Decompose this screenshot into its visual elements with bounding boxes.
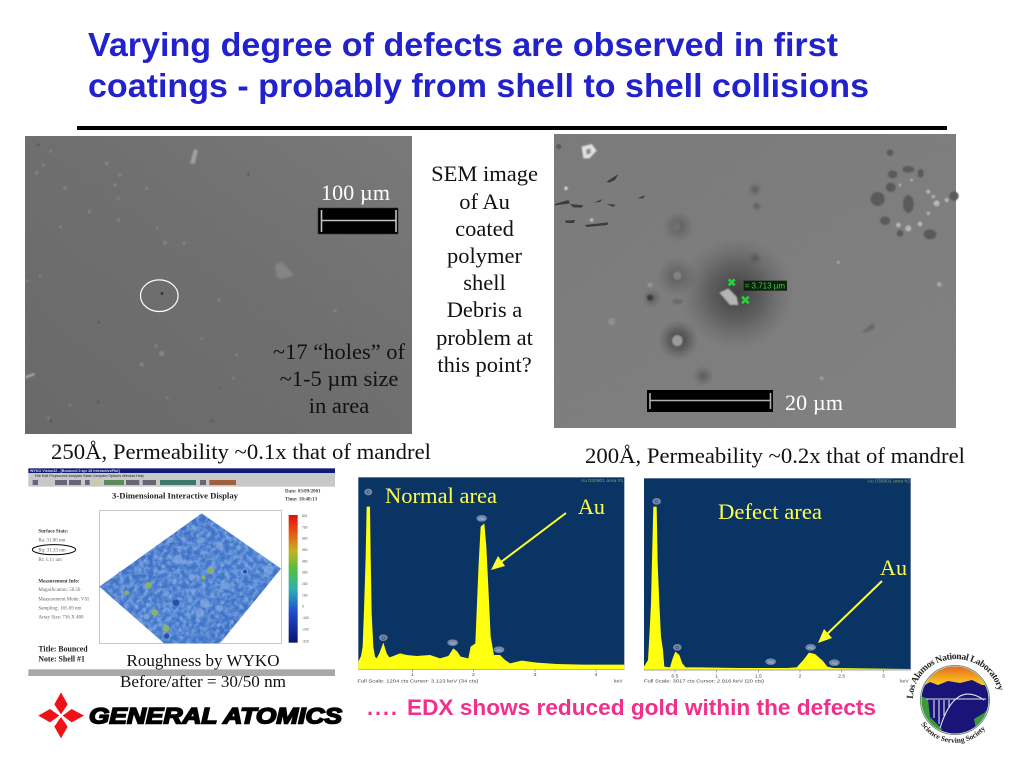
colour scale: [289, 514, 309, 644]
hole marker circle: [140, 280, 178, 312]
wordmark: GENERAL ATOMICS: [89, 704, 342, 728]
spectrum: [358, 507, 624, 669]
WYKO roughness label: Roughness by WYKO: [126, 651, 280, 670]
SEM description text: [431, 161, 538, 377]
panel: WYKO screenshot: WYKO Vision32 - [Bounced 3 apr 26 InteractivePlot]: [30, 469, 121, 473]
panel: right SEM image: [554, 134, 959, 428]
surface stats: Rt: 1.11 um: [38, 558, 62, 563]
SEM description text: Debris a: [447, 297, 522, 322]
arrow to Au peak: [491, 513, 566, 570]
measurement marks: = 3.713 µm: [745, 282, 785, 291]
panel: EDX normal area: keV: [614, 678, 623, 684]
3D surface plot: [99, 511, 282, 643]
label Au: Au: [578, 494, 605, 519]
WYKO roughness label: [120, 651, 286, 691]
peak labels: Au: [808, 645, 814, 650]
panel: EDX defect area: 1.5: [755, 673, 762, 679]
WYKO roughness label: Before/after = 30/50 nm: [120, 672, 286, 691]
surface stats: Magnification: 50.50: [38, 588, 81, 593]
SEM description text: polymer: [447, 243, 522, 268]
holes note: [273, 339, 406, 418]
holes note: ~17 “holes” of: [273, 339, 406, 364]
peak labels: [364, 489, 504, 653]
surface stats: Surface Stats:: [38, 529, 68, 534]
plot title note: Note: Shell #1: [38, 654, 85, 663]
scale bar 100 um: [318, 208, 398, 234]
peak labels: Au: [450, 640, 456, 645]
plot title note: [38, 644, 88, 663]
panel: EDX defect area: 2.5: [838, 673, 845, 679]
peak labels: O: [676, 645, 680, 650]
colour scale: 801: [302, 514, 308, 518]
peak labels: Au: [496, 647, 502, 652]
bright debris: [564, 144, 942, 380]
dark streaks: [555, 144, 645, 227]
panel: EDX normal area: [357, 477, 624, 684]
panel: EDX normal area: 4: [595, 672, 598, 678]
SEM description text: SEM image: [431, 161, 538, 186]
debris specks: [25, 144, 337, 422]
SEM description text: of Au: [459, 189, 510, 214]
icon: red star: [38, 692, 84, 738]
panel: WYKO screenshot: Date: 03/09/2001: [285, 490, 321, 495]
surface stats: Measurement Info:: [38, 579, 80, 584]
holes note: in area: [309, 393, 369, 418]
colour scale: 400: [302, 559, 308, 563]
panel: WYKO screenshot: [28, 468, 335, 676]
plot title note: Title: Bounced: [38, 644, 88, 653]
label defect area: Defect area: [718, 499, 822, 524]
title: Varying degree of defects are observed in first: [88, 26, 838, 63]
panel: WYKO screenshot: 3-Dimensional Interactive Display: [112, 490, 239, 500]
peak labels: O: [382, 635, 386, 640]
panel: EDX normal area: 1: [411, 672, 414, 678]
colour scale: 700: [302, 525, 308, 529]
caption: left SEM: 250Å, Permeability ~0.1x that of mandrel: [51, 439, 431, 464]
title: coatings - probably from shell to shell collisions: [88, 67, 869, 104]
ring defect: [871, 149, 959, 239]
arrow to Au peak: [818, 581, 882, 643]
peak labels: Au: [479, 516, 485, 521]
panel: EDX defect area: 3: [882, 673, 885, 679]
logo ring text: Los Alamos National Laboratory: [906, 652, 1002, 699]
surface stats: Ra: 31.00 nm: [38, 538, 65, 543]
holes note: ~1-5 µm size: [280, 366, 398, 391]
dark halos: [642, 182, 793, 387]
colour scale: 100: [302, 593, 308, 597]
scale label: 100 µm: [321, 180, 390, 205]
logo ring text: [906, 652, 1002, 744]
colour scale: 500: [302, 548, 308, 552]
panel: EDX defect area: Full Scale: 3017 cts Cursor: 2.916 keV (20 cts): [644, 679, 764, 685]
panel: EDX defect area: 1: [715, 673, 718, 679]
SEM description text: this point?: [437, 352, 532, 377]
surface stats: Measurement Mode: VSI: [38, 597, 89, 602]
peak labels: C: [655, 499, 659, 504]
peak labels: C: [367, 490, 371, 495]
panel: EDX normal area: Full Scale: 1204 cts Cursor: 3.123 keV (34 cts): [357, 678, 479, 684]
panel: EDX defect area: 0.5: [672, 673, 679, 679]
spectrum: [644, 507, 911, 670]
SEM description text: coated: [455, 216, 514, 241]
peak labels: Au: [831, 660, 838, 665]
caption: right SEM: 200Å, Permeability ~0.2x that of mandrel: [585, 443, 965, 468]
logo ring text: Science Serving Society: [921, 722, 985, 744]
colour scale: -200: [302, 627, 309, 631]
panel: WYKO screenshot: Time: 10:48:13: [285, 498, 318, 503]
colour scale: 600: [302, 537, 308, 541]
surface stats: Sampling: 165.69 nm: [38, 606, 82, 611]
scale label: 20 µm: [785, 390, 843, 415]
panel: EDX normal area: 2: [472, 672, 475, 678]
colour scale: -100: [302, 616, 309, 620]
panel: EDX normal area: Au 030901 area #1: [581, 478, 624, 484]
logo: Los Alamos National Laboratory: [906, 652, 1002, 744]
colour scale: 200: [302, 582, 308, 586]
SEM description text: problem at: [436, 325, 534, 350]
surface stats: Array Size: 736 X 480: [38, 615, 84, 620]
SEM description text: shell: [463, 270, 506, 295]
label normal area: Normal area: [385, 483, 497, 508]
panel: WYKO screenshot: File Edit Proprocess Analysis Stats Compare Options Window Help: [35, 474, 144, 478]
panel: left SEM image: [25, 136, 412, 434]
scale bar 20 um: [647, 390, 773, 412]
label Au: Au: [880, 555, 907, 580]
peak labels: [652, 498, 840, 666]
logo: General Atomics: [38, 692, 342, 738]
panel: EDX defect area: Au 030901 area #2: [868, 479, 910, 485]
callout: EDX conclusion: ....: [367, 695, 397, 720]
surface stats: Rq: 31.33 nm: [38, 548, 66, 553]
title: [88, 26, 869, 104]
panel: EDX defect area: keV: [900, 679, 909, 685]
toolbar icons: [33, 480, 236, 485]
panel: EDX defect area: 2: [799, 673, 802, 679]
colour scale: 0: [302, 605, 304, 609]
callout: EDX conclusion: EDX shows reduced gold within the defects: [407, 695, 876, 720]
measurement marks: [729, 279, 787, 303]
colour scale: -315: [302, 640, 309, 644]
peak labels: Au: [768, 659, 774, 664]
panel: EDX normal area: 3: [534, 672, 537, 678]
colour scale: 300: [302, 571, 308, 575]
panel: EDX defect area: [644, 478, 911, 685]
surface stats: [38, 529, 89, 620]
